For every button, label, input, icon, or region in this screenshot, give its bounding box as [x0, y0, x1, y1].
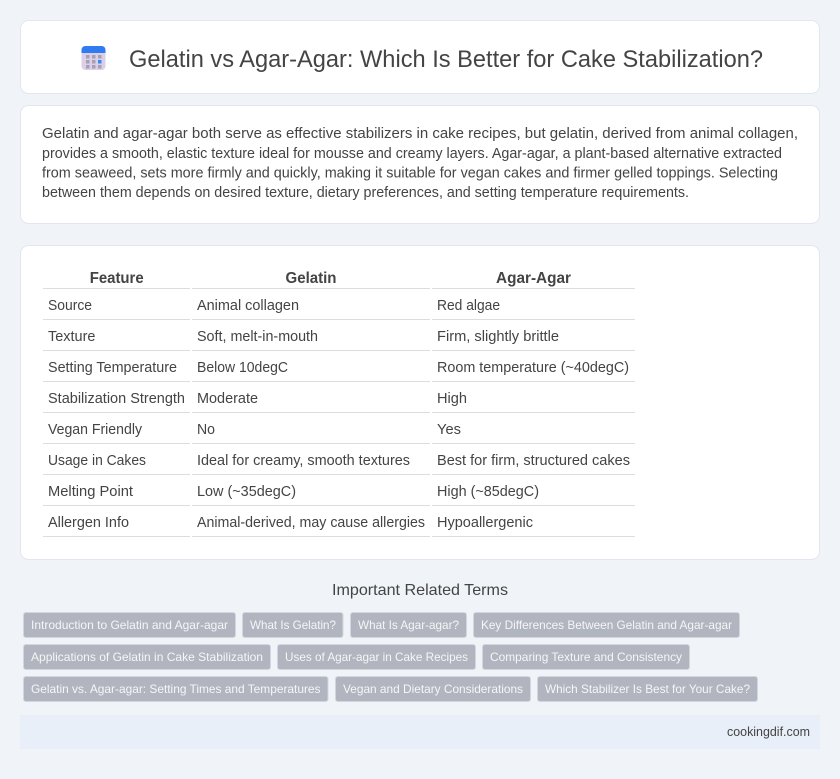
- row: melting point: High (~85degC): [437, 484, 539, 500]
- row: allergen info: [43, 515, 635, 537]
- header panel: [20, 20, 820, 94]
- intro paragraph: between them depends on desired texture, dietary preferences, and setting temperature requirements.: [42, 185, 689, 201]
- table header row: Feature: [90, 270, 144, 287]
- tag: [538, 676, 758, 702]
- intro paragraph: from seaweed, sets more firmly and quickly, making it suitable for vegan cakes and firmer gelled toppings. Selecting: [42, 166, 778, 182]
- icon: calendar: [82, 46, 106, 70]
- row: setting temperature: Below 10degC: [197, 360, 288, 376]
- tag: Key Differences Between Gelatin and Agar-agar: [481, 618, 732, 632]
- row: texture: [43, 329, 635, 351]
- tag: Uses of Agar-agar in Cake Recipes: [285, 650, 468, 664]
- row: usage in cakes: Usage in Cakes: [48, 453, 146, 469]
- table header row: [43, 270, 635, 289]
- related term tags: [24, 612, 758, 702]
- row: melting point: Low (~35degC): [197, 484, 296, 500]
- tag: Which Stabilizer Is Best for Your Cake?: [545, 682, 750, 696]
- tag: [474, 612, 740, 638]
- row: vegan friendly: Yes: [437, 422, 461, 438]
- row: source: Animal collagen: [197, 298, 299, 314]
- title: Gelatin vs Agar-Agar: Which Is Better for Cake Stabilization?: [129, 46, 763, 73]
- row: setting temperature: Setting Temperature: [48, 360, 177, 376]
- tag: [24, 612, 236, 638]
- row: vegan friendly: Vegan Friendly: [48, 422, 143, 438]
- row: allergen info: Animal-derived, may cause allergies: [197, 515, 425, 531]
- row: source: Red algae: [437, 298, 500, 314]
- tag: [242, 612, 343, 638]
- tag: [24, 676, 328, 702]
- tag: [350, 612, 466, 638]
- row: usage in cakes: [43, 453, 635, 475]
- row: usage in cakes: Ideal for creamy, smooth textures: [197, 453, 410, 469]
- related terms heading: Important Related Terms: [332, 582, 508, 599]
- table header row: Agar-Agar: [496, 270, 571, 287]
- table panel: [20, 246, 820, 560]
- tag: Introduction to Gelatin and Agar-agar: [31, 618, 228, 632]
- row: melting point: [43, 484, 635, 506]
- row: stabilization strength: Moderate: [197, 391, 258, 407]
- intro paragraph: Gelatin and agar-agar both serve as effective stabilizers in cake recipes, but gelatin, derived from animal collagen,: [42, 126, 798, 142]
- tag: Vegan and Dietary Considerations: [343, 682, 523, 696]
- tag: What Is Agar-agar?: [358, 618, 459, 632]
- tag: [278, 644, 476, 670]
- footer bar: [20, 715, 820, 749]
- row: source: Source: [48, 298, 92, 314]
- tag: [24, 644, 270, 670]
- row: texture: Soft, melt-in-mouth: [197, 329, 318, 345]
- row: stabilization strength: [43, 391, 635, 413]
- row: texture: Texture: [48, 329, 96, 345]
- row: texture: Firm, slightly brittle: [437, 329, 559, 345]
- tag: [482, 644, 690, 670]
- row: vegan friendly: No: [197, 422, 215, 438]
- comparison table: [43, 270, 635, 537]
- tag: Gelatin vs. Agar-agar: Setting Times and Temperatures: [31, 682, 320, 696]
- row: usage in cakes: Best for firm, structured cakes: [437, 453, 630, 469]
- row: setting temperature: [43, 360, 635, 382]
- tag: What Is Gelatin?: [250, 618, 336, 632]
- row: stabilization strength: High: [437, 391, 467, 407]
- tag: [336, 676, 530, 702]
- row: stabilization strength: Stabilization Strength: [48, 391, 185, 407]
- intro paragraph: [42, 126, 798, 201]
- row: vegan friendly: [43, 422, 635, 444]
- row: allergen info: Hypoallergenic: [437, 515, 533, 531]
- table header row: Gelatin: [286, 270, 336, 287]
- tag: Applications of Gelatin in Cake Stabilization: [31, 650, 263, 664]
- row: melting point: Melting Point: [48, 484, 133, 500]
- tag: Comparing Texture and Consistency: [490, 650, 682, 664]
- row: allergen info: Allergen Info: [48, 515, 129, 531]
- footer site name: cookingdif.com: [727, 725, 810, 739]
- intro panel: [20, 106, 820, 224]
- row: source: [43, 298, 635, 320]
- intro paragraph: provides a smooth, elastic texture ideal for mousse and creamy layers. Agar-agar, a plant-based alternative extracted: [42, 146, 782, 162]
- row: setting temperature: Room temperature (~40degC): [437, 360, 629, 376]
